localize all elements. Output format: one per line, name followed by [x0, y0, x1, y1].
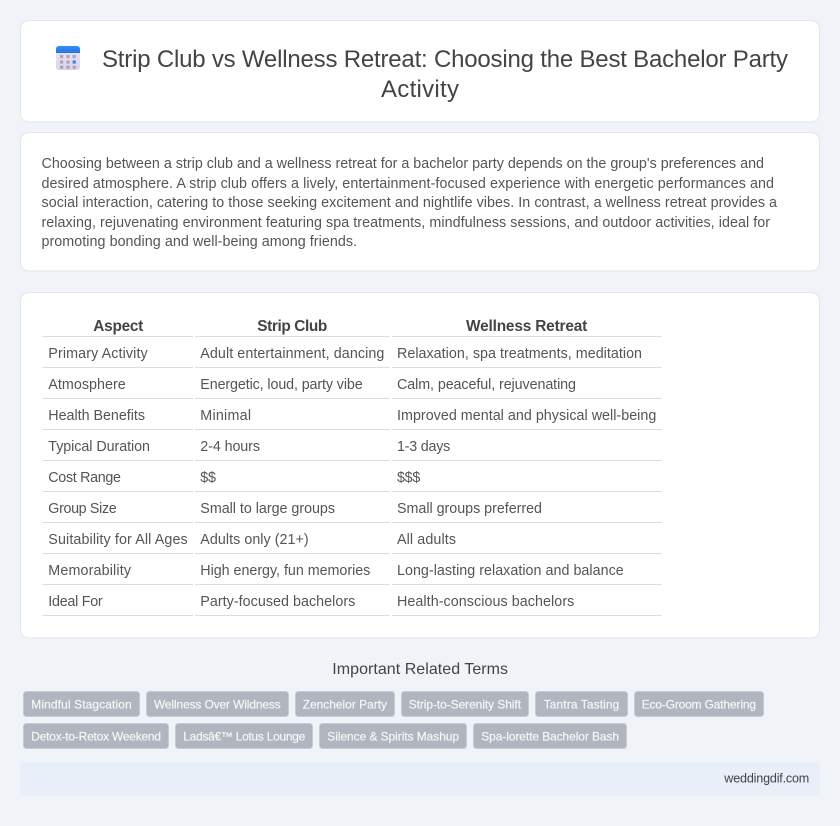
tag: detox-to-retox weekend: Detox-to-Retox Weekend: [31, 729, 161, 743]
row: ideal for: Ideal For: [48, 594, 103, 610]
row: ideal for: Health-conscious bachelors: [397, 594, 574, 610]
row: atmosphere: Atmosphere: [48, 377, 126, 393]
tag: tantra tasting: Tantra Tasting: [544, 697, 619, 711]
intro text block: promoting bonding and well-being among friends.: [42, 234, 357, 250]
row: typical duration: [48, 439, 450, 455]
row: ideal for: Party-focused bachelors: [200, 594, 355, 610]
footer source text: weddingdif.com: [723, 772, 809, 786]
row: typical duration: Typical Duration: [48, 439, 150, 455]
footer bar: [20, 762, 820, 796]
tag: strip-to-serenity shift: Strip-to-Serenity Shift: [409, 697, 522, 711]
tag: wellness over wildness: Wellness Over Wildness: [154, 697, 281, 711]
row: cost range: Cost Range: [48, 470, 121, 486]
row: suitability: Adults only (21+): [200, 532, 309, 548]
tag: mindful stagcation: [24, 692, 140, 716]
tag: spa-lorette bachelor bash: Spa-lorette Bachelor Bash: [481, 729, 619, 743]
intro text block: social interaction, catering to those seeking excitement and nightlife vibes. In contrast, a wellness retreat provides a: [42, 195, 777, 211]
intro text block: relaxing, rejuvenating environment featuring spa treatments, mindfulness sessions, and outdoor activities, ideal for: [42, 215, 770, 231]
row: memorability: [48, 563, 624, 579]
row: health benefits: [48, 408, 656, 424]
heading: related terms: Important Related Terms: [332, 661, 508, 678]
table row lines: [43, 336, 662, 616]
tag: zenchelor party: [296, 692, 394, 716]
row: health benefits: Improved mental and physical well-being: [397, 408, 656, 424]
row: primary activity: [48, 346, 642, 362]
row: cost range: $$: [200, 470, 216, 486]
tag: eco-groom gathering: [634, 692, 764, 716]
header panel: [20, 20, 820, 122]
table header row: Aspect: [93, 318, 143, 335]
tag: wellness over wildness: [146, 692, 288, 716]
row: group size: Small groups preferred: [397, 501, 542, 517]
intro text block: [42, 156, 777, 250]
row: memorability: Memorability: [48, 563, 132, 579]
table header row: Wellness Retreat: [466, 318, 587, 335]
row: memorability: High energy, fun memories: [200, 563, 370, 579]
table header row: Strip Club: [257, 318, 327, 335]
row: cost range: [48, 470, 420, 486]
title: [102, 46, 788, 103]
tag: eco-groom gathering: Eco-Groom Gathering: [642, 697, 756, 711]
title: Activity: [381, 76, 459, 103]
row: typical duration: 1-3 days: [397, 439, 450, 455]
row: health benefits: Health Benefits: [48, 408, 145, 424]
table header row: [93, 318, 587, 335]
tag: zenchelor party: Zenchelor Party: [303, 697, 387, 711]
panel: introduction: [20, 132, 820, 271]
row: health benefits: Minimal: [200, 408, 251, 424]
related term tags: [24, 692, 764, 748]
row: primary activity: Adult entertainment, dancing: [200, 346, 384, 362]
row: group size: Small to large groups: [200, 501, 335, 517]
row: memorability: Long-lasting relaxation and balance: [397, 563, 624, 579]
tag: mindful stagcation: Mindful Stagcation: [31, 697, 132, 711]
row: atmosphere: [48, 377, 576, 393]
row: cost range: $$$: [397, 470, 420, 486]
title: Strip Club vs Wellness Retreat: Choosing the Best Bachelor Party: [102, 46, 788, 73]
intro text block: desired atmosphere. A strip club offers a lively, entertainment-focused experience with energetic performances and: [42, 176, 774, 192]
tag: silence and spirits mashup: [320, 724, 466, 748]
tag: lads lotus lounge: [176, 724, 312, 748]
row: group size: [48, 501, 542, 517]
panel: comparison table: [20, 292, 820, 638]
tag: detox-to-retox weekend: [24, 724, 168, 748]
row: atmosphere: Energetic, loud, party vibe: [200, 377, 363, 393]
tag: spa-lorette bachelor bash: [474, 724, 626, 748]
row: suitability: All adults: [397, 532, 456, 548]
row: primary activity: Primary Activity: [48, 346, 149, 362]
tag: tantra tasting: [536, 692, 628, 716]
row: typical duration: 2-4 hours: [200, 439, 260, 455]
row: atmosphere: Calm, peaceful, rejuvenating: [397, 377, 576, 393]
row: ideal for: [48, 594, 574, 610]
row: suitability: [48, 532, 456, 548]
tag: silence and spirits mashup: Silence & Spirits Mashup: [327, 729, 459, 743]
icon: calendar: [56, 46, 80, 70]
intro text block: Choosing between a strip club and a wellness retreat for a bachelor party depends on the group's preferences and: [42, 156, 764, 172]
tag: strip-to-serenity shift: [402, 692, 528, 716]
row: primary activity: Relaxation, spa treatments, meditation: [397, 346, 642, 362]
row: group size: Group Size: [48, 501, 117, 517]
row: suitability: Suitability for All Ages: [48, 532, 188, 548]
tag: lads lotus lounge: Ladsâ€™ Lotus Lounge: [183, 729, 306, 743]
